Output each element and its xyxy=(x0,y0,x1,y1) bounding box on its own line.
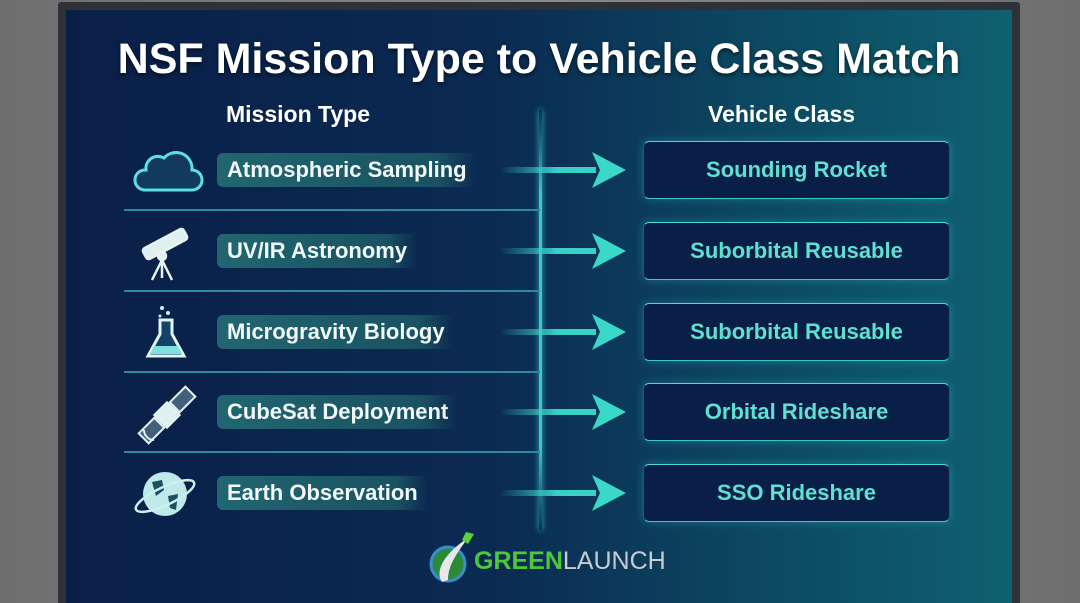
arrow 2 xyxy=(503,233,626,269)
arrow 3 xyxy=(503,314,626,350)
vehicle: orbital rideshare xyxy=(643,383,950,441)
icon: globe xyxy=(134,472,196,516)
vehicle: suborbital reusable xyxy=(643,303,950,361)
label: cubesat deployment xyxy=(217,395,458,429)
label: earth observation xyxy=(217,476,428,510)
label: UV/IR astronomy: UV/IR Astronomy xyxy=(227,238,407,263)
vehicle: suborbital reusable xyxy=(643,222,950,280)
icon: telescope xyxy=(142,228,188,280)
title: NSF Mission Type to Vehicle Class Match xyxy=(118,35,960,83)
label: microgravity biology: Microgravity Biology xyxy=(227,319,445,344)
label: atmospheric sampling xyxy=(217,153,477,187)
vehicle: SSO rideshare xyxy=(643,464,950,522)
logo: greenlaunch: GREENLAUNCH xyxy=(474,547,666,575)
icon: flask xyxy=(146,306,186,358)
arrow 1 xyxy=(503,152,626,188)
vehicle: sounding rocket xyxy=(643,141,950,199)
arrow 4 xyxy=(503,394,626,430)
vertical divider xyxy=(539,110,542,530)
icon: cloud xyxy=(134,151,204,192)
vehicle: suborbital reusable: Suborbital Reusable xyxy=(690,319,903,344)
heading: vehicle class: Vehicle Class xyxy=(708,101,855,127)
label: UV/IR astronomy xyxy=(217,234,417,268)
label: microgravity biology xyxy=(217,315,455,349)
logo: greenlaunch xyxy=(430,532,666,582)
vehicle: orbital rideshare: Orbital Rideshare xyxy=(705,399,888,424)
vehicle: sounding rocket: Sounding Rocket xyxy=(706,157,887,182)
label: atmospheric sampling: Atmospheric Sampling xyxy=(227,157,467,182)
heading: mission type: Mission Type xyxy=(226,101,370,127)
vehicle: suborbital reusable: Suborbital Reusable xyxy=(690,238,903,263)
vehicle: SSO rideshare: SSO Rideshare xyxy=(717,480,876,505)
arrow 5 xyxy=(503,475,626,511)
label: cubesat deployment: CubeSat Deployment xyxy=(227,399,448,424)
icon: satellite xyxy=(137,385,197,445)
label: earth observation: Earth Observation xyxy=(227,480,418,505)
